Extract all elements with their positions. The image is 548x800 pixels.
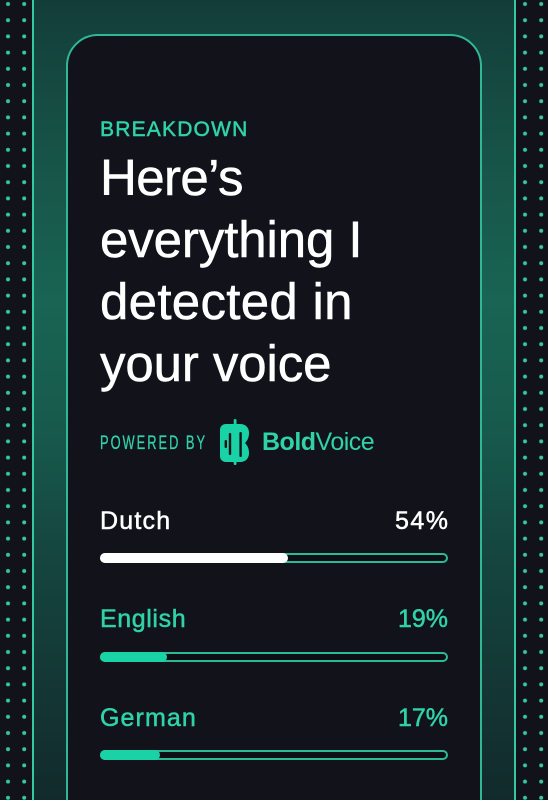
row: German — [100, 704, 448, 732]
value: 54%: 54% — [395, 507, 450, 535]
icon: BoldVoice logo — [220, 419, 249, 465]
title: Here’s — [100, 149, 243, 206]
title: everything I — [100, 211, 362, 268]
title: detected in — [100, 273, 353, 330]
bar: Dutch 54% — [100, 553, 448, 563]
row: English — [100, 605, 448, 633]
bar: German 17% — [100, 750, 448, 760]
label: English: English — [100, 605, 186, 633]
value: 19%: 19% — [398, 605, 448, 633]
value: 17%: 17% — [398, 704, 448, 732]
logo wordmark: BoldVoice — [262, 428, 374, 456]
powered by label: POWERED BY — [100, 432, 207, 454]
bar: English 19% — [100, 652, 448, 662]
row: Dutch — [100, 507, 450, 535]
title — [100, 149, 362, 392]
eyebrow: breakdown: BREAKDOWN — [100, 118, 248, 141]
label: German: German — [100, 704, 197, 732]
title: your voice — [100, 335, 331, 392]
label: Dutch: Dutch — [100, 507, 171, 535]
card panel — [66, 34, 482, 800]
